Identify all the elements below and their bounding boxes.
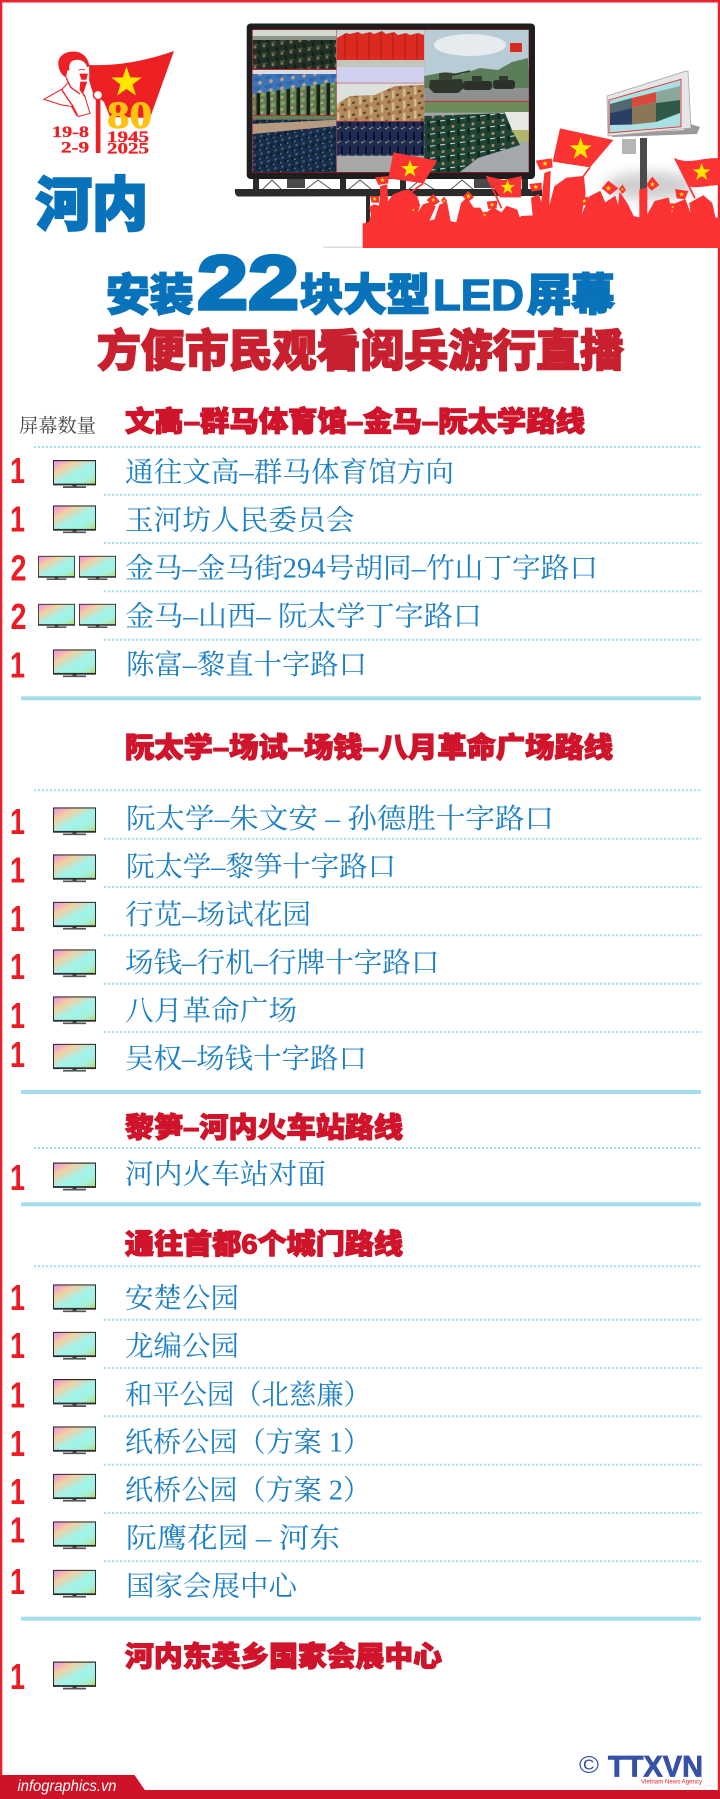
platform: [612, 122, 700, 137]
title line 2: 方便市民观看阅兵游行直播: [97, 326, 624, 376]
legend label: number of screens: 屏幕数量: [19, 415, 96, 437]
row: 1 screen: 国家会展中心: [126, 1571, 298, 1603]
row: 1 screen: 1: [10, 1034, 25, 1075]
row: 1 screen: [10, 1423, 371, 1464]
row: 1 screen: 和平公园（北慈廉）: [125, 1379, 371, 1411]
row: 1 screen: 阮太学–朱文安 – 孙德胜十字路口: [126, 803, 554, 835]
flag poles: [412, 158, 695, 208]
photo: blue berets: [253, 70, 336, 115]
photo: dark blue march: [337, 122, 424, 172]
large flag left: [388, 152, 437, 183]
route 2 heading: 阮太学–场试–场钱–八月革命广场路线: [125, 731, 613, 763]
row: 1 screen: [10, 1325, 239, 1366]
board: [607, 71, 691, 136]
panel: route 4: [10, 1228, 701, 1621]
dates: 1945: [107, 129, 149, 146]
row: 1 screen: 1: [10, 898, 25, 939]
title line 1: [106, 241, 615, 326]
crowd silhouette: [363, 172, 720, 247]
row: 1 screen: 1: [10, 1157, 25, 1198]
route 1 heading: 文高–群马体育馆–金马–阮太学路线: [125, 405, 585, 437]
row: 2 screens: 2: [10, 548, 26, 588]
row: 1 screen: 1: [10, 1561, 25, 1602]
small billboard: [605, 71, 700, 200]
dates: 19-8: [52, 124, 89, 141]
shadow cloud: [605, 172, 695, 200]
row: 1 screen: 纸桥公园（方案 1）: [125, 1427, 371, 1459]
row: 1 screen: [10, 450, 454, 491]
dates: 2-9: [61, 140, 89, 156]
row: 1 screen: [10, 801, 554, 842]
billboard frame: [247, 24, 535, 179]
row: 1 screen: 场钱–行机–行牌十字路口: [125, 947, 440, 979]
logo: TTXVN copyright: ©: [579, 1752, 599, 1779]
title line 1: 安装: [106, 271, 194, 320]
row: 1 screen: [10, 946, 440, 987]
row: 1 screen: 1: [10, 1471, 25, 1512]
row: 1 screen: 1: [10, 450, 25, 491]
row: 1 screen: 1: [10, 644, 25, 686]
row: 1 screen: 1: [10, 850, 25, 890]
row: 1 screen: 龙编公园: [125, 1331, 239, 1363]
row: 1 screen: 安楚公园: [125, 1282, 239, 1314]
row: 1 screen: 通往文高–群马体育馆方向: [125, 456, 454, 488]
row: 2 screens: [10, 596, 482, 637]
flag with star: [88, 51, 174, 118]
dates: 2025: [107, 140, 149, 158]
row: 1 screen: 行苋–场试花园: [125, 899, 311, 931]
row: 1 screen: 玉河坊人民委员会: [125, 505, 354, 537]
logo: TTXVN copyright: Vietnam News Agency: [641, 1780, 702, 1786]
website label: infographics.vn: [18, 1778, 117, 1795]
row: 1 screen: [10, 644, 367, 686]
photo: green uniforms: [424, 102, 529, 172]
row: 2 screens: 2: [10, 596, 26, 637]
row: 1 screen: 1: [10, 1510, 25, 1550]
photo: tan uniforms: [337, 83, 424, 121]
pole: [640, 138, 647, 194]
row: 1 screen: [10, 1510, 340, 1554]
number 80: 80: [107, 94, 152, 137]
photo: navy column: [253, 116, 336, 172]
panel: route 2: [10, 731, 701, 1094]
panel: route 1: [10, 405, 701, 700]
row: 1 screen: 1: [10, 995, 25, 1036]
small flags: [370, 158, 688, 218]
row: 1 screen: 河内火车站对面: [125, 1159, 326, 1191]
row: 1 screen: 1: [10, 1423, 25, 1464]
heading: Hanoi: 河内: [36, 173, 148, 238]
row: 1 screen: 1: [10, 498, 25, 540]
cheering crowd with flags: [323, 128, 720, 248]
panel: route 3: [10, 1111, 701, 1206]
board photos: [610, 86, 680, 125]
title line 1: 屏幕: [527, 271, 615, 320]
large flag right: [675, 158, 720, 187]
row: 1 screen: [10, 1656, 96, 1697]
photo: tanks: [424, 30, 529, 101]
portrait: [44, 52, 90, 117]
footer bar: [0, 1775, 720, 1799]
row: 1 screen: 1: [10, 801, 25, 842]
row: 1 screen: [10, 1374, 371, 1416]
photo: soldiers green: [253, 30, 336, 69]
microphone: [93, 90, 103, 153]
big LED billboard: [235, 24, 542, 228]
heading: 河内东英乡国家会展中心: [125, 1640, 442, 1672]
row: 1 screen: [10, 498, 354, 540]
title line 1: 22: [197, 241, 299, 326]
row: 1 screen: [10, 898, 311, 939]
title line 1: LED: [433, 271, 524, 320]
route 4 heading: 通往首都6个城门路线: [125, 1228, 403, 1260]
row: 1 screen: 吴权–场钱十字路口: [125, 1043, 367, 1075]
row: 1 screen: [10, 1034, 367, 1075]
row: 1 screen: 陈富–黎直十字路口: [126, 649, 367, 681]
ground shadow: [323, 247, 365, 248]
logo: 80th anniversary emblem: [44, 51, 174, 158]
row: 1 screen: 八月革命广场: [125, 995, 297, 1027]
row: 1 screen: [10, 995, 297, 1036]
row: 1 screen: [10, 1471, 371, 1512]
row: 1 screen: [10, 1561, 298, 1603]
panel: national exhibition centre: [10, 1640, 442, 1697]
logo: TTXVN copyright: TTXVN: [608, 1750, 703, 1784]
title line 1: 块大型: [300, 271, 430, 320]
row: 1 screen: 1: [10, 1656, 25, 1697]
row: 1 screen: 1: [10, 1374, 25, 1416]
row: 1 screen: 1: [10, 1277, 25, 1318]
row: 1 screen: 1: [10, 1325, 25, 1366]
row: 1 screen: [10, 1157, 326, 1198]
medium flag: [487, 176, 522, 197]
title: [97, 241, 624, 376]
row: 1 screen: 纸桥公园（方案 2）: [125, 1475, 371, 1507]
row: 2 screens: 金马–山西– 阮太学丁字路口: [125, 601, 482, 633]
row: 1 screen: 1: [10, 946, 25, 987]
route 3 heading: 黎笋–河内火车站路线: [125, 1111, 403, 1143]
row: 1 screen: [10, 1277, 239, 1318]
row: 1 screen: 阮鹰花园 – 河东: [126, 1522, 340, 1554]
dates: [52, 124, 149, 158]
row: 2 screens: 金马–金马街294号胡同–竹山丁字路口: [125, 553, 598, 585]
row: 1 screen: [10, 850, 396, 890]
large flag centre: [553, 128, 613, 167]
row: 1 screen: 阮太学–黎笋十字路口: [126, 851, 396, 883]
photo: red flags: [337, 30, 424, 83]
row: 2 screens: [10, 548, 598, 588]
billboard support: [235, 176, 542, 228]
